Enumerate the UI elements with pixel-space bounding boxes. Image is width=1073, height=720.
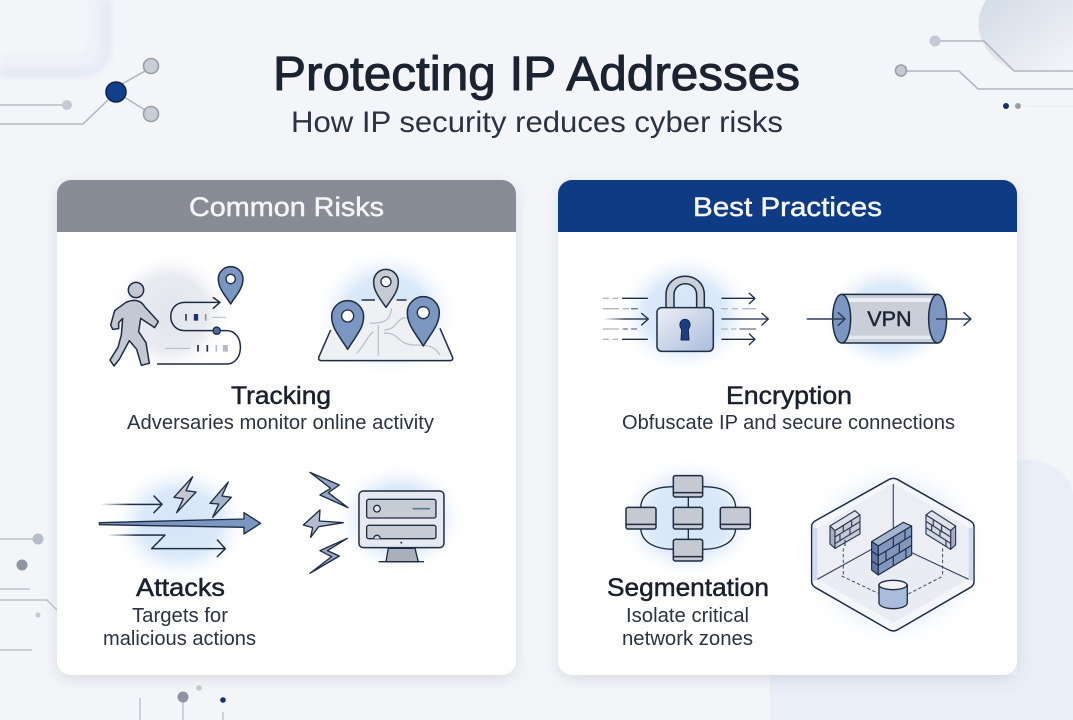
- panel header: best practices: [558, 180, 1017, 232]
- heading: common risks: Common Risks: [189, 192, 384, 222]
- heading: best practices: Best Practices: [693, 192, 882, 222]
- label: tracking: Tracking: [231, 382, 331, 410]
- decoration: lower-left network: [0, 534, 226, 720]
- right firewall: [926, 511, 956, 549]
- decoration: bottom-right blob: [770, 460, 1073, 720]
- subtitle: How IP security reduces cyber risks: [291, 106, 783, 139]
- description: tracking: Adversaries monitor online activity: [127, 412, 434, 434]
- icon: network segmentation: [613, 455, 763, 582]
- label: attacks: Attacks: [136, 574, 225, 602]
- icon: person tracking route: [107, 250, 243, 377]
- central firewall: [872, 522, 912, 575]
- decoration: top-left network: [0, 58, 158, 124]
- decoration: top-right network: [896, 36, 1073, 109]
- description: encryption: Obfuscate IP and secure connections: [622, 412, 955, 434]
- description: attacks: malicious actions: [103, 628, 256, 650]
- panel: common risks: [57, 180, 516, 675]
- icon: server under attack: [303, 460, 468, 577]
- icon: isometric secure zone: [792, 455, 995, 652]
- description: segmentation: network zones: [622, 628, 753, 650]
- label: segmentation: Segmentation: [607, 574, 769, 602]
- icon: attack arrows: [99, 462, 261, 585]
- panel: best practices: [558, 180, 1017, 675]
- icon: VPN tunnel: [807, 258, 971, 375]
- title: Protecting IP Addresses: [273, 48, 800, 101]
- description: attacks: [103, 605, 256, 650]
- description: segmentation: Isolate critical: [626, 605, 749, 627]
- decoration: top-right blob: [979, 0, 1073, 71]
- left firewall: [830, 511, 860, 548]
- icon: map with pins: [312, 247, 462, 380]
- icon: padlock with data streams: [603, 250, 768, 377]
- label: encryption: Encryption: [726, 382, 852, 410]
- panel header: common risks: [57, 180, 516, 232]
- decoration: top-left rounded shape: [0, 0, 107, 73]
- database: [879, 585, 907, 609]
- description: segmentation: [622, 605, 753, 650]
- description: attacks: Targets for: [132, 605, 228, 627]
- icon: VPN tunnel: VPN: [867, 307, 912, 331]
